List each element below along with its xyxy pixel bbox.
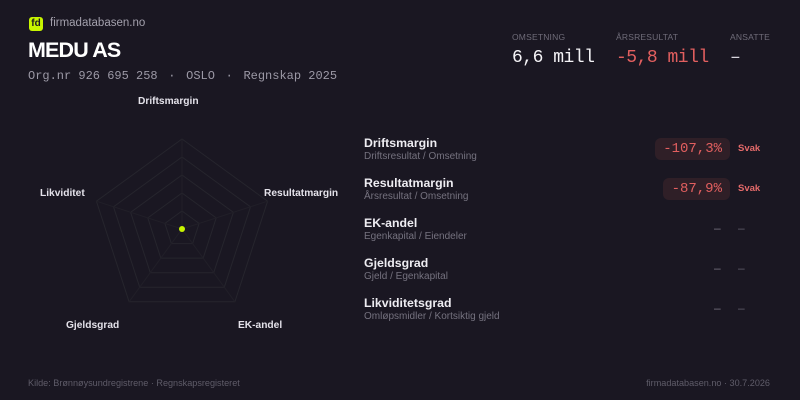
ek-andel name: EK-andel — [364, 216, 417, 230]
resultatmargin value pill — [663, 178, 730, 200]
årsresultat value: -5,8 mill — [616, 48, 709, 68]
footer site and date: firmadatabasen.no · 30.7.2026 — [646, 378, 770, 388]
gjeldsgrad name: Gjeldsgrad — [364, 256, 428, 270]
stat: omsetning — [512, 32, 594, 68]
årsresultat label: ÅRSRESULTAT — [616, 32, 678, 42]
company meta line: Org.nr 926 695 258 OSLO Regnskap 2025 — [28, 69, 337, 83]
radar label: resultatmargin: Resultatmargin — [264, 188, 338, 199]
stat: ansatte — [730, 32, 770, 68]
ek-andel formula: Egenkapital / Eiendeler — [364, 231, 467, 242]
logo icon — [29, 17, 43, 31]
resultatmargin formula: Årsresultat / Omsetning — [364, 191, 468, 202]
ek-andel rating: – — [738, 221, 745, 235]
radar label: gjeldsgrad: Gjeldsgrad — [66, 320, 119, 331]
gjeldsgrad value: – — [714, 261, 721, 275]
resultatmargin name: Resultatmargin — [364, 176, 454, 190]
logo icon: fd — [31, 18, 41, 29]
driftsmargin value pill — [655, 138, 730, 160]
radar centre dot — [179, 226, 185, 232]
driftsmargin value: -107,3% — [663, 141, 722, 157]
company meta line: · — [168, 69, 175, 83]
ansatte value: – — [730, 48, 741, 68]
stat: årsresultat — [616, 32, 709, 68]
radar label: ek-andel: EK-andel — [238, 320, 282, 331]
driftsmargin formula: Driftsresultat / Omsetning — [364, 151, 477, 162]
footer source: Kilde: Brønnøysundregistrene · Regnskapsregisteret — [28, 378, 240, 388]
brand name: firmadatabasen.no — [50, 17, 145, 29]
resultatmargin value: -87,9% — [672, 181, 722, 197]
radar label: likviditet: Likviditet — [40, 188, 85, 199]
gjeldsgrad rating: – — [738, 261, 745, 275]
resultatmargin rating: Svak — [738, 183, 760, 194]
omsetning value: 6,6 mill — [512, 48, 594, 68]
likviditetsgrad rating: – — [738, 301, 745, 315]
ansatte label: ANSATTE — [730, 32, 770, 42]
company title: MEDU AS — [28, 38, 120, 62]
radar label: driftsmargin: Driftsmargin — [138, 96, 199, 107]
radar chart — [96, 138, 268, 302]
ek-andel value: – — [714, 221, 721, 235]
likviditetsgrad name: Likviditetsgrad — [364, 296, 451, 310]
driftsmargin name: Driftsmargin — [364, 136, 437, 150]
likviditetsgrad formula: Omløpsmidler / Kortsiktig gjeld — [364, 311, 500, 322]
driftsmargin rating: Svak — [738, 143, 760, 154]
gjeldsgrad formula: Gjeld / Egenkapital — [364, 271, 448, 282]
company meta line: · — [226, 69, 233, 83]
omsetning label: OMSETNING — [512, 32, 565, 42]
likviditetsgrad value: – — [714, 301, 721, 315]
